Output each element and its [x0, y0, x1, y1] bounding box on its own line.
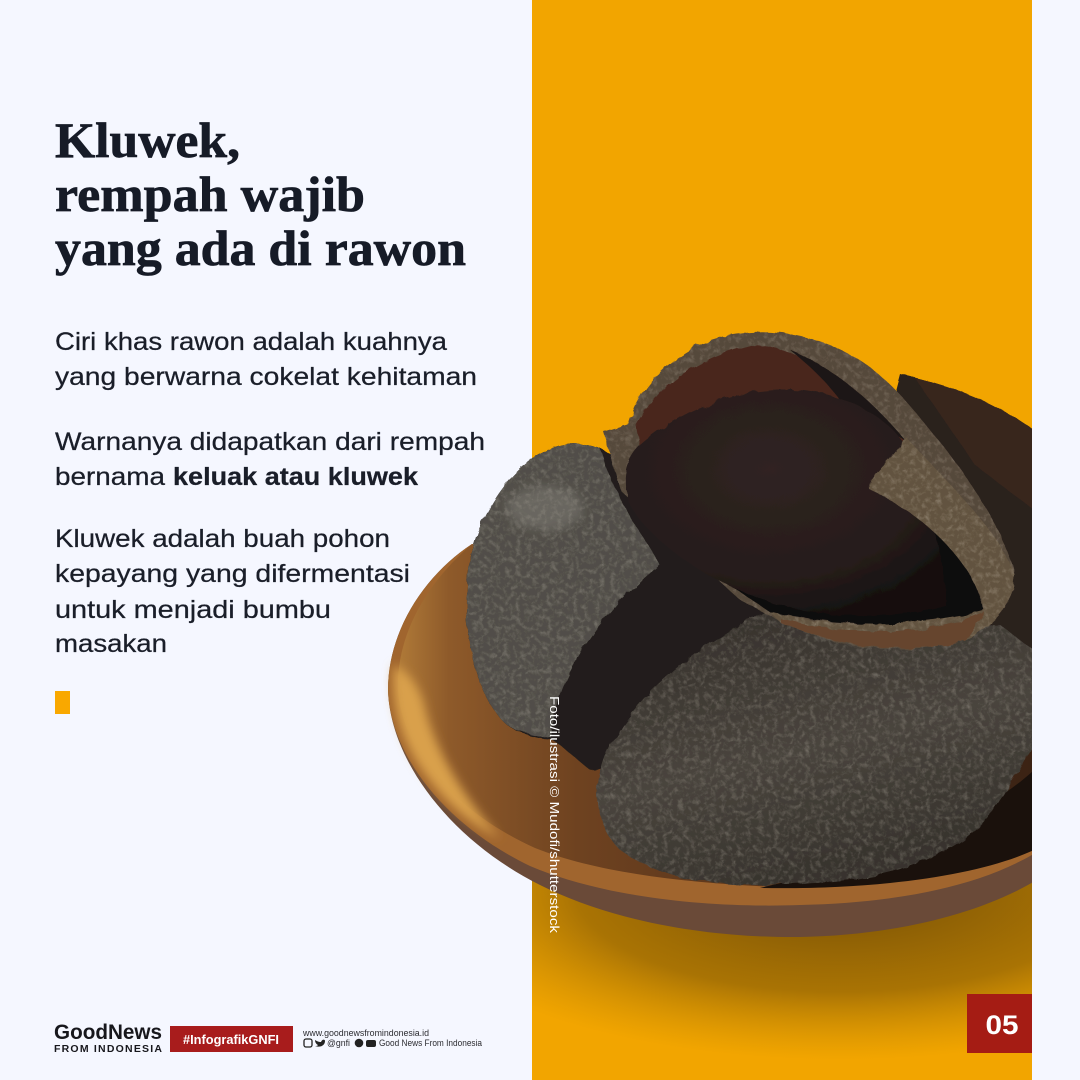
footer logo — [54, 1021, 162, 1055]
text block: paragraph two: keluak atau kluwek — [173, 463, 418, 491]
panel: yellow backdrop — [532, 0, 1032, 1080]
footer contact details: @gnfi — [327, 1038, 350, 1048]
text block: paragraph three: masakan — [55, 630, 167, 658]
nut shell back — [604, 332, 1015, 649]
icon: facebook — [355, 1039, 363, 1047]
nuts with rough edges — [466, 332, 1040, 885]
footer logo: FROM INDONESIA — [54, 1043, 162, 1055]
title — [55, 112, 466, 276]
photo: kluwek nuts in wooden bowl — [388, 332, 1040, 937]
shell front fragment — [770, 436, 1015, 648]
rear right nut — [880, 374, 1034, 720]
icon: twitter — [315, 1040, 325, 1047]
wooden bowl — [388, 544, 1040, 937]
footer contact details: Good News From Indonesia — [379, 1038, 482, 1048]
footer contact details: www.goodnewsfromindonesia.id — [302, 1028, 429, 1038]
text block: paragraph two: Warnanya didapatkan dari rempah — [55, 428, 485, 456]
title: yang ada di rawon — [55, 220, 466, 276]
icon: instagram — [304, 1039, 312, 1047]
accent marker — [55, 691, 70, 714]
title: Kluwek, — [55, 112, 240, 168]
page number badge: 05 — [986, 1010, 1018, 1040]
hashtag badge — [170, 1026, 293, 1052]
large front nut — [598, 608, 1040, 885]
footer logo: GoodNews — [54, 1021, 162, 1044]
text block: paragraph one — [55, 328, 477, 391]
icon: youtube — [366, 1040, 376, 1047]
text block: paragraph three: untuk menjadi bumbu — [55, 596, 331, 624]
photo credit: Foto/ilustrasi © Mudofi/shutterstock — [547, 696, 562, 934]
text block: paragraph one: Ciri khas rawon adalah kuahnya — [55, 328, 447, 356]
text block: paragraph two — [55, 428, 485, 491]
title: rempah wajib — [55, 166, 365, 222]
dark kernel — [625, 389, 946, 616]
footer contact details — [302, 1028, 482, 1048]
hashtag badge: #InfografikGNFI — [183, 1033, 279, 1047]
text block: paragraph three: kepayang yang difermentasi — [55, 560, 410, 588]
page number badge — [967, 994, 1032, 1053]
left nut — [466, 443, 790, 770]
text block: paragraph three: Kluwek adalah buah pohon — [55, 525, 390, 553]
text block: paragraph one: yang berwarna cokelat kehitaman — [55, 363, 477, 391]
text block: paragraph three — [55, 525, 410, 658]
text block: paragraph two: bernama — [55, 463, 165, 491]
